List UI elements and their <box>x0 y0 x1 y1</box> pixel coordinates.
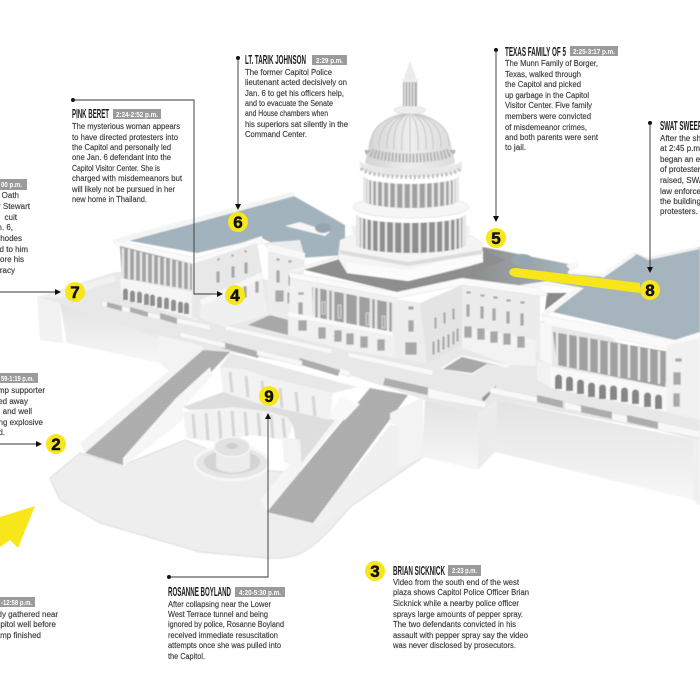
terrace surface <box>37 270 700 441</box>
body text <box>660 134 700 216</box>
body text: to jail. <box>505 143 526 152</box>
callout: Lt. Tarik Johnson <box>245 52 349 139</box>
leader arrow to 5 <box>493 48 499 222</box>
body text: charged with misdemeanors but <box>72 174 183 183</box>
body text: racy <box>0 266 15 275</box>
body text: members were convicted <box>505 112 591 121</box>
time tag: 59-1:19 p.m. <box>1 376 34 383</box>
callout: Rosanne Boyland <box>168 584 285 661</box>
marker 6: 6 <box>233 213 243 232</box>
body text <box>505 59 599 152</box>
time tag: 2:29 p.m. <box>316 58 343 65</box>
body text: Visitor Center. Five family <box>505 101 592 110</box>
right wing <box>462 247 700 420</box>
callout: Lt. Tarik Johnson: LT. TARIK JOHNSON <box>245 52 306 67</box>
marker 9 <box>259 386 279 406</box>
illustration: Capitol building and grounds <box>37 62 700 558</box>
left wing <box>113 192 345 327</box>
body text: hodes <box>0 234 22 243</box>
body text: to have directed protesters into <box>72 133 179 142</box>
callout: SWAT sweep (clipped at right) <box>660 118 700 216</box>
yellow direction arrow <box>0 506 35 548</box>
body text: was never disclosed by prosecutors. <box>392 641 516 650</box>
leader arrow to 2 <box>0 441 42 447</box>
marker 2 <box>46 434 66 454</box>
body text <box>168 600 284 661</box>
body text: Capitol Visitor Center. She is <box>72 164 160 173</box>
marker 3: 3 <box>370 562 380 581</box>
body text: lieutenant acted decisively on <box>245 78 347 87</box>
leader arrow to 9 <box>167 413 271 579</box>
body text: Jan. 6 to get his officers help, <box>245 89 344 98</box>
callout: Texas Family of 5 <box>505 44 618 152</box>
body text: After collapsing near the Lower <box>168 600 271 609</box>
small terrace stairs and parapets <box>102 301 700 438</box>
time tag: -12:58 p.m. <box>1 600 32 607</box>
time tag: 2:24-2:52 p.m. <box>116 112 158 119</box>
body text: The two defendants convicted in his <box>393 620 516 629</box>
body text: one Jan. 6 defendant into the <box>72 153 172 162</box>
time tag: 2:25-3:17 p.m. <box>573 49 615 56</box>
marker 2: 2 <box>51 435 61 454</box>
body text: the Capitol and personally led <box>72 143 171 152</box>
callout: Rosanne Boyland: ROSANNE BOYLAND <box>168 584 231 599</box>
leader line to 4 <box>71 98 223 297</box>
callout: first entry (clipped at left) <box>0 597 58 640</box>
marker 7 <box>65 282 85 302</box>
body text: attempts once she was pulled into <box>168 641 282 650</box>
body text: law enforce <box>660 187 700 196</box>
body text <box>245 68 349 139</box>
capitol dome <box>338 62 483 281</box>
body text: and House chambers when <box>245 109 328 118</box>
body text: ignored by police, Rosanne Boyland <box>168 620 284 629</box>
marker 9: 9 <box>264 387 274 406</box>
body text: and both parents were sent <box>505 133 599 142</box>
body text: new home in Thailand. <box>72 195 147 204</box>
terrace walls <box>37 275 700 506</box>
marker 5 <box>486 228 506 248</box>
body text: Texas, walked through <box>505 70 581 79</box>
stair wings and grand stairs <box>80 350 423 528</box>
body text: his superiors sat silently in the <box>245 120 349 129</box>
body text: sprays large amounts of pepper spray. <box>393 610 523 619</box>
callout: Pink Beret <box>71 106 183 204</box>
body text: After the sh <box>660 134 700 143</box>
body text: The mysterious woman appears <box>72 122 180 131</box>
body text: the Capitol. <box>168 652 205 661</box>
body text: cuit <box>5 213 18 222</box>
upper terrace floor and exedra walls <box>183 353 360 467</box>
leader arrow to 6 <box>235 56 241 210</box>
leader arrow to 8 <box>647 121 653 273</box>
marker 6 <box>228 212 248 232</box>
body text: West Terrace tunnel and being <box>168 610 268 619</box>
body text: received immediate resuscitation <box>168 631 278 640</box>
body text: The former Capitol Police <box>245 68 333 77</box>
yellow route line <box>509 268 640 293</box>
body text: assault with pepper spray say the video <box>393 631 529 640</box>
callout: Brian Sicknick: BRIAN SICKNICK <box>393 563 445 578</box>
body text: the building <box>660 197 700 206</box>
body text <box>0 386 45 437</box>
body text <box>0 610 58 640</box>
body text: protesters. <box>660 207 698 216</box>
callout: Texas Family of 5: TEXAS FAMILY OF 5 <box>505 44 566 59</box>
callout: pipe bomb entry (clipped at left) <box>0 373 45 437</box>
plaza <box>50 440 423 558</box>
body text: Command Center. <box>245 130 307 139</box>
marker 5: 5 <box>491 229 501 248</box>
marker 8: 8 <box>645 281 655 300</box>
time tag: 2:23 p.m. <box>452 568 477 575</box>
body text <box>71 122 183 204</box>
body text: the Capitol and picked <box>505 80 581 89</box>
marker 4 <box>225 285 245 305</box>
fountain <box>195 437 269 480</box>
body text: and to evacuate the Senate <box>245 99 333 108</box>
body text: will likely not be pursued in her <box>71 185 175 194</box>
callout: Pink Beret: PINK BERET <box>72 106 109 121</box>
body text: of protester <box>660 165 700 174</box>
time tag: 4:20-5:30 p.m. <box>239 590 281 597</box>
body text: of misdemeanor crimes, <box>505 123 587 132</box>
marker 7: 7 <box>70 283 80 302</box>
body text <box>392 578 529 650</box>
marker 4: 4 <box>230 286 240 305</box>
central block <box>287 250 548 366</box>
marker 8 <box>640 280 660 300</box>
time tag <box>448 565 481 576</box>
body text <box>0 191 31 275</box>
body text: The Munn Family of Borger, <box>505 59 598 68</box>
body text: Sicknick while a nearby police officer <box>393 599 519 608</box>
time tag: 00 p.m. <box>1 182 22 189</box>
callout: Brian Sicknick <box>365 561 529 650</box>
body text: Video from the south end of the west <box>393 578 520 587</box>
body text: up garbage in the Capitol <box>505 91 589 100</box>
callout: unnamed Oath Keepers entry (clipped at left) <box>0 179 31 275</box>
leader arrow to 7 <box>0 289 61 295</box>
body text: at 2:45 p.m <box>660 144 700 153</box>
body text: plaza shows Capitol Police Officer Brian <box>393 588 529 597</box>
marker 3 <box>365 561 385 581</box>
